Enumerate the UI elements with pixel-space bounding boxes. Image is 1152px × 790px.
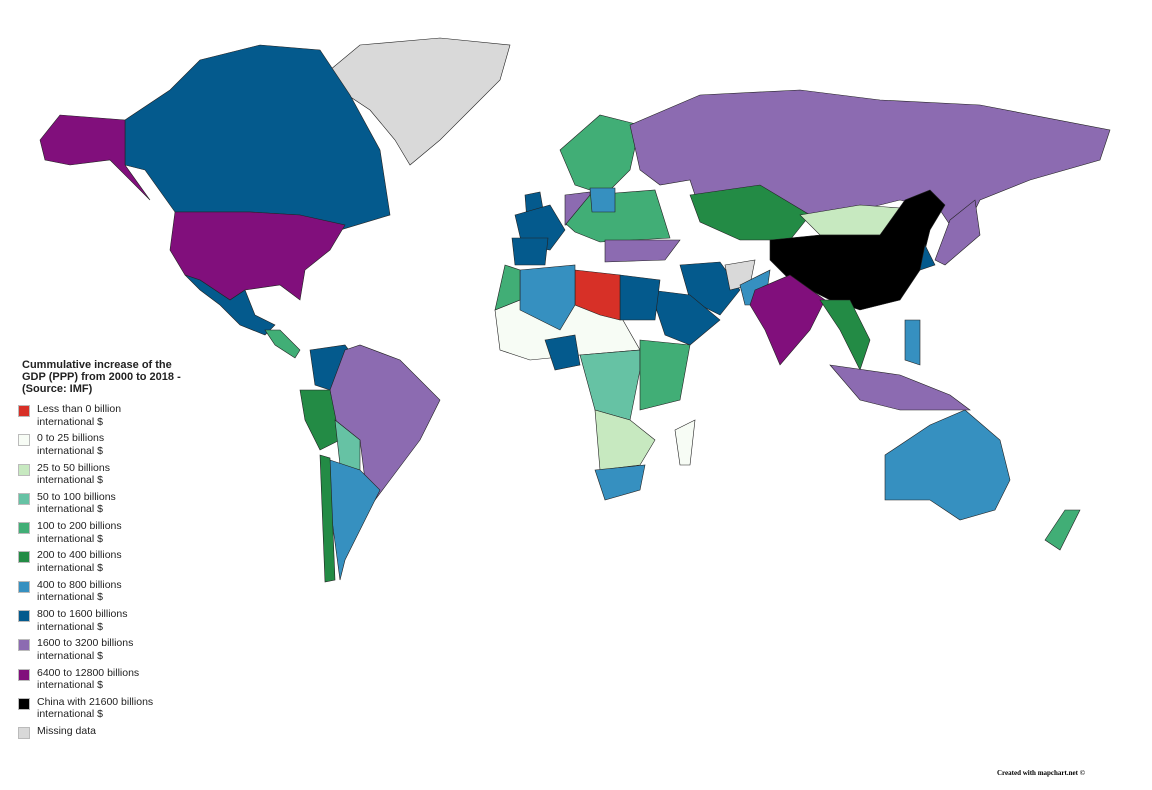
USA	[170, 212, 345, 300]
legend item: international $	[37, 621, 103, 633]
legend item: 50 to 100 billions	[37, 491, 116, 503]
legend item	[18, 403, 121, 428]
legend item: international $	[37, 533, 103, 545]
Saudi Arabia	[650, 290, 720, 345]
Algeria	[520, 265, 575, 330]
legend item: 400 to 800 billions	[37, 579, 122, 591]
legend item: China with 21600 billions	[37, 696, 153, 708]
Japan	[935, 200, 980, 265]
legend item: 200 to 400 billions	[37, 549, 122, 561]
Madagascar	[675, 420, 695, 465]
legend item: international $	[37, 591, 103, 603]
Mexico	[185, 275, 275, 335]
legend item	[18, 667, 139, 691]
legend item: international $	[37, 708, 103, 720]
legend item: Less than 0 billion	[37, 403, 121, 415]
Iran	[680, 262, 740, 315]
East Africa	[640, 340, 690, 410]
Bolivia	[335, 420, 360, 470]
Spain	[512, 238, 548, 265]
China	[770, 190, 945, 310]
Pakistan	[740, 270, 770, 305]
legend item: international $	[37, 416, 103, 428]
legend	[18, 359, 181, 739]
Chile	[320, 455, 335, 582]
legend item: international $	[37, 679, 103, 691]
legend item: 800 to 1600 billions	[37, 608, 128, 620]
Eastern Europe	[566, 190, 670, 242]
West Africa	[495, 300, 640, 360]
Mongolia	[800, 205, 900, 235]
France	[515, 205, 565, 250]
Turkey	[605, 240, 680, 262]
legend item: 1600 to 3200 billions	[37, 637, 133, 649]
legend item: international $	[37, 445, 103, 457]
Colombia/Venezuela	[310, 345, 360, 390]
Russia	[630, 90, 1110, 240]
legend item	[18, 725, 96, 739]
Southern Africa	[595, 410, 655, 470]
legend title: Cummulative increase of the GDP (PPP) from 2000 to 2018 - (Source: IMF)	[22, 359, 181, 395]
Egypt	[620, 275, 660, 320]
Peru	[300, 390, 340, 450]
legend item: 25 to 50 billions	[37, 462, 110, 474]
credit: Created with mapchart.net ©	[997, 769, 1085, 777]
Canada	[125, 45, 390, 230]
Brazil	[330, 345, 440, 500]
Indonesia	[830, 365, 970, 410]
legend item	[18, 637, 133, 662]
Germany	[565, 192, 590, 225]
legend item: Missing data	[37, 725, 96, 737]
Poland	[590, 188, 615, 212]
legend item	[18, 579, 122, 603]
Korea	[920, 245, 935, 270]
legend item: international $	[37, 650, 103, 662]
Kazakhstan	[690, 185, 810, 240]
Greenland	[330, 38, 510, 165]
legend item: international $	[37, 503, 103, 515]
legend item: international $	[37, 562, 103, 574]
legend item	[18, 491, 116, 515]
legend item	[18, 520, 122, 545]
New Zealand	[1045, 510, 1080, 550]
legend item	[18, 696, 153, 720]
Alaska	[40, 115, 150, 200]
legend item: 100 to 200 billions	[37, 520, 122, 532]
Australia	[885, 410, 1010, 520]
Central America	[265, 330, 300, 358]
legend item: international $	[37, 474, 103, 486]
UK	[525, 192, 547, 234]
Libya	[575, 270, 620, 320]
Southeast Asia	[820, 300, 870, 370]
legend item: 0 to 25 billions	[37, 432, 104, 444]
Central Africa	[580, 350, 640, 420]
Argentina	[330, 460, 380, 580]
legend item	[18, 432, 104, 457]
legend item: 6400 to 12800 billions	[37, 667, 139, 679]
Afghanistan	[725, 260, 755, 290]
legend item	[18, 549, 122, 574]
Morocco	[495, 265, 520, 310]
South Africa	[595, 465, 645, 500]
India	[750, 275, 825, 365]
Philippines	[905, 320, 920, 365]
legend item	[18, 608, 128, 633]
Nigeria	[545, 335, 580, 370]
legend item	[18, 462, 110, 486]
Scandinavia	[560, 115, 640, 195]
